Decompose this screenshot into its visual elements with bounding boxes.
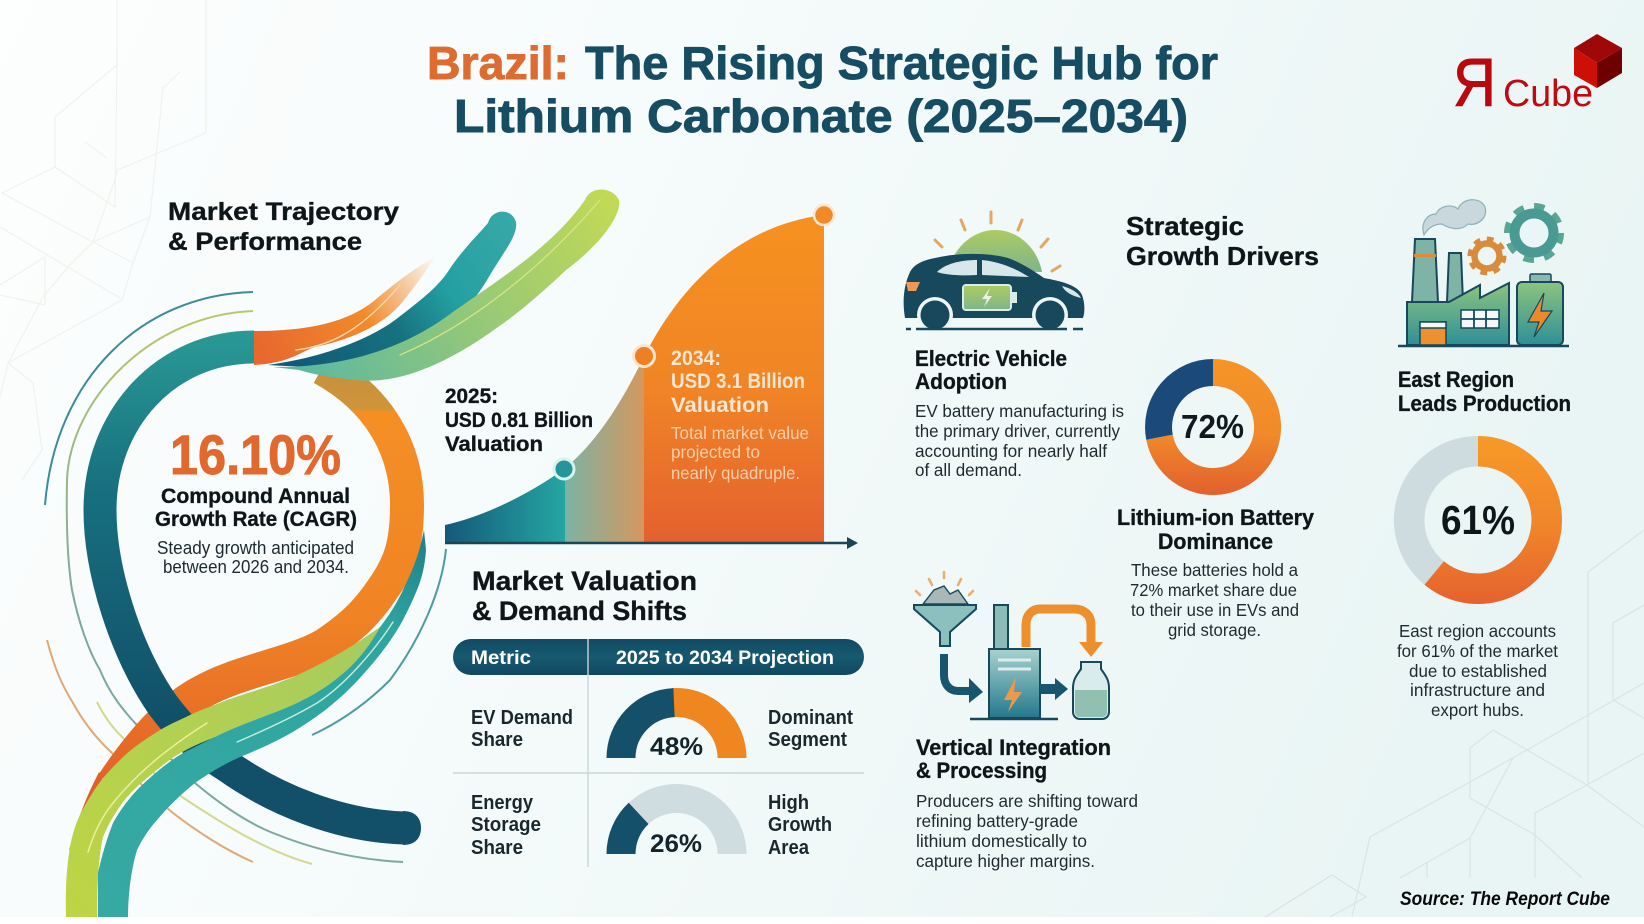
area chart: valuation growth: nearly quadruple. <box>671 463 800 483</box>
text: lithium-ion battery dominance: 72% market share due <box>1130 580 1297 600</box>
table: demand shifts: Share <box>471 837 523 859</box>
title: Brazil: <box>427 37 569 89</box>
logo: RCube <box>1453 34 1622 121</box>
heading: market trajectory: Market Trajectory <box>168 198 399 226</box>
text: electric vehicle adoption <box>915 346 1124 480</box>
table: demand shifts: Area <box>768 837 810 859</box>
logo: RCube: Cube <box>1503 73 1593 115</box>
text: east region heading: East Region <box>1398 367 1514 392</box>
text: east region body: East region accounts <box>1399 621 1556 641</box>
area chart: valuation growth: 2034: <box>671 347 721 370</box>
text: vertical integration: Producers are shifting toward <box>916 791 1138 811</box>
table: demand shifts: 2025 to 2034 Projection <box>616 648 834 669</box>
text: east region heading <box>1398 367 1571 416</box>
gauge: energy storage 26% <box>621 799 732 858</box>
text: lithium-ion battery dominance: to their use in EVs and <box>1131 600 1299 620</box>
gauge: EV demand 48% <box>621 702 732 761</box>
table: demand shifts: Metric <box>471 648 531 669</box>
text: east region heading: Leads Production <box>1398 391 1571 416</box>
area chart: valuation growth: 2025: <box>445 385 498 408</box>
text: east region body: for 61% of the market <box>1397 641 1558 661</box>
heading: market valuation: Market Valuation <box>472 566 697 596</box>
donut chart: 72% <box>1159 372 1268 481</box>
text: east region body: due to established <box>1409 661 1547 681</box>
CAGR stat: Compound Annual <box>161 485 350 508</box>
area chart: valuation growth <box>445 200 858 549</box>
table: demand shifts: Share <box>471 729 523 751</box>
CAGR stat: 16.10% <box>170 423 341 486</box>
area chart: valuation growth: USD 0.81 Billion <box>445 409 593 432</box>
text: vertical integration: capture higher margins. <box>916 851 1095 871</box>
heading: strategic growth drivers: Strategic <box>1126 211 1244 241</box>
heading: market trajectory <box>168 198 399 256</box>
table: demand shifts: Storage <box>471 814 541 836</box>
area chart: valuation growth: USD 3.1 Billion <box>671 370 805 393</box>
icon: factory and battery <box>1398 200 1569 346</box>
text: lithium-ion battery dominance: These batteries hold a <box>1131 560 1298 580</box>
ribbon graphic <box>45 190 619 917</box>
text: electric vehicle adoption: Electric Vehicle <box>915 346 1067 371</box>
CAGR stat <box>155 423 357 577</box>
text: vertical integration: refining battery-grade <box>916 811 1078 831</box>
donut chart: 72%: 72% <box>1181 408 1244 445</box>
text: electric vehicle adoption: Adoption <box>915 369 1007 394</box>
icon: electric car <box>904 212 1084 333</box>
text: electric vehicle adoption: EV battery manufacturing is <box>915 401 1124 421</box>
text: east region body: export hubs. <box>1431 700 1524 720</box>
area chart: valuation growth: Valuation <box>671 394 769 417</box>
area chart: valuation growth: Total market value <box>671 423 809 443</box>
text: electric vehicle adoption: of all demand. <box>915 460 1022 480</box>
heading: market valuation <box>472 566 697 626</box>
table: demand shifts: EV Demand <box>471 707 573 729</box>
table: demand shifts: Dominant <box>768 707 853 729</box>
text: vertical integration: lithium domestically to <box>916 831 1087 851</box>
table: demand shifts: Segment <box>768 729 847 751</box>
icon: vertical integration process <box>914 572 1109 719</box>
text: lithium-ion battery dominance: Lithium-ion Battery <box>1117 505 1315 530</box>
text: east region body <box>1397 621 1558 720</box>
table: demand shifts: Growth <box>768 814 832 836</box>
logo: RCube: Я <box>1453 45 1496 121</box>
text: lithium-ion battery dominance: Dominance <box>1158 529 1273 554</box>
gauge: energy storage 26%: 26% <box>650 830 702 858</box>
text: vertical integration: Vertical Integration <box>916 735 1111 760</box>
heading: market valuation: & Demand Shifts <box>472 596 687 626</box>
table: demand shifts: Energy <box>471 792 534 814</box>
source note: Source: The Report Cube <box>1400 889 1610 910</box>
donut chart: 61% <box>1409 451 1547 589</box>
text: vertical integration: & Processing <box>916 758 1047 783</box>
text: lithium-ion battery dominance: grid storage. <box>1168 620 1261 640</box>
CAGR stat: between 2026 and 2034. <box>163 557 349 577</box>
heading: strategic growth drivers <box>1126 211 1319 271</box>
text: lithium-ion battery dominance <box>1117 505 1315 640</box>
title: The Rising Strategic Hub for <box>585 37 1218 89</box>
gauge: EV demand 48%: 48% <box>650 733 703 761</box>
title: Lithium Carbonate (2025–2034) <box>454 90 1188 142</box>
table: demand shifts: High <box>768 792 809 814</box>
text: east region body: infrastructure and <box>1410 680 1545 700</box>
CAGR stat: Growth Rate (CAGR) <box>155 508 357 531</box>
area chart: valuation growth: projected to <box>671 442 760 462</box>
area chart: valuation growth: Valuation <box>445 433 543 456</box>
table: demand shifts <box>453 639 864 867</box>
heading: strategic growth drivers: Growth Drivers <box>1126 241 1319 271</box>
heading: market trajectory: & Performance <box>168 228 362 256</box>
text: electric vehicle adoption: the primary driver, currently <box>915 421 1120 441</box>
CAGR stat: Steady growth anticipated <box>157 538 354 558</box>
donut chart: 61%: 61% <box>1441 497 1515 543</box>
text: electric vehicle adoption: accounting for nearly half <box>915 441 1107 461</box>
title <box>427 37 1218 142</box>
text: vertical integration <box>916 735 1138 871</box>
